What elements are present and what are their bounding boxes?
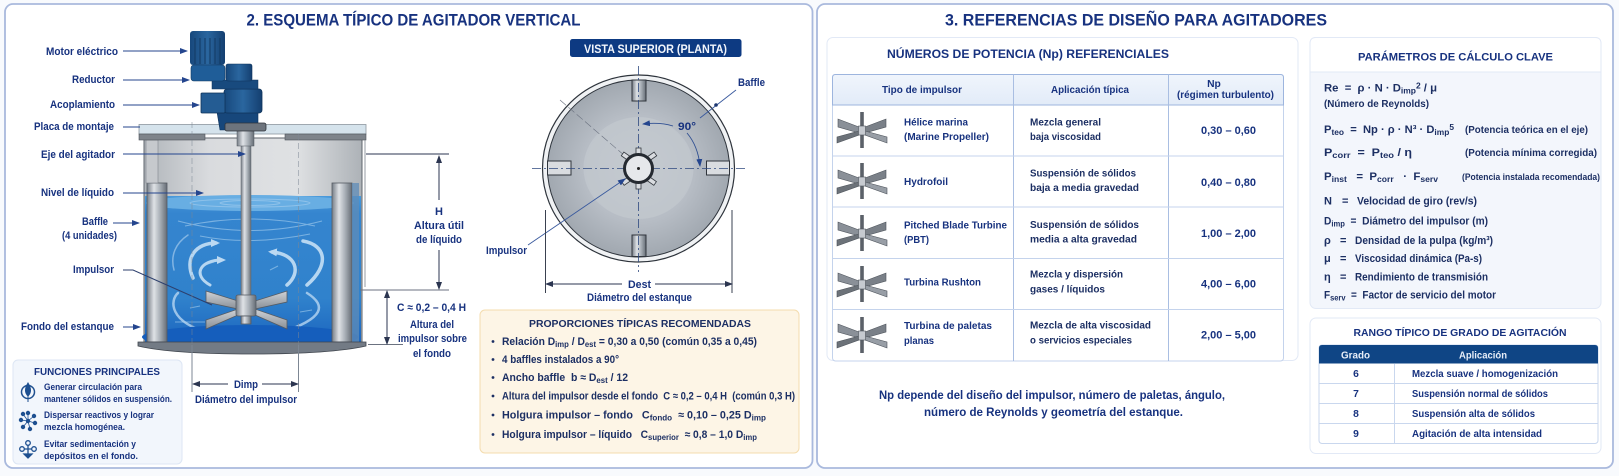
formula: potencia corregida bbox=[1324, 147, 1597, 160]
row: grado 9: Agitación de alta intensidad bbox=[1412, 429, 1542, 440]
formula: potencia teórica: 5 bbox=[1449, 123, 1454, 132]
row: turbina de paletas planas: 2,00 – 5,00 bbox=[1201, 330, 1256, 342]
list: proporciones: = 0,30 a 0,50 (común 0,35 a 0,45) bbox=[596, 336, 757, 348]
baffle top bbox=[632, 80, 646, 101]
text: dispersión bbox=[44, 410, 154, 433]
row: hydrofoil: Hydrofoil bbox=[904, 176, 948, 188]
diagram: planta del estanque bbox=[532, 66, 745, 272]
diagonal line bbox=[560, 100, 625, 156]
center lines bbox=[532, 66, 745, 272]
motor fins bbox=[195, 38, 220, 64]
formula: Reynolds: imp bbox=[1401, 86, 1416, 96]
labels: componentes con flechas: Motor eléctrico bbox=[46, 46, 118, 58]
formula: potencia instalada: (Potencia instalada recomendada) bbox=[1462, 172, 1600, 183]
note: Np: Np depende del diseño del impulsor, número de paletas, ángulo, bbox=[879, 388, 1225, 402]
row: grado 7 bbox=[1353, 389, 1548, 400]
definitions: = Factor de servicio del motor bbox=[1346, 290, 1497, 302]
labels: componentes con flechas: Eje del agitador bbox=[41, 149, 116, 161]
labels: componentes con flechas: Reductor bbox=[72, 74, 116, 86]
labels: componentes con flechas: Fondo del estanque bbox=[21, 321, 114, 333]
definitions: = bbox=[1340, 272, 1346, 284]
heading: parámetros: PARÁMETROS DE CÁLCULO CLAVE bbox=[1358, 50, 1553, 64]
definitions: = Diámetro del impulsor (m) bbox=[1345, 216, 1488, 228]
grid lines bbox=[1319, 364, 1598, 443]
formula: potencia instalada: serv bbox=[1420, 175, 1438, 184]
formula: potencia corregida: teo bbox=[1380, 151, 1394, 160]
text: dispersión: mezcla homogénea. bbox=[44, 422, 125, 433]
row: grado 9 bbox=[1353, 429, 1542, 440]
header labels: Np bbox=[1207, 79, 1221, 90]
dimension: Dimp: Dimp bbox=[234, 379, 258, 391]
bullets bbox=[492, 340, 494, 436]
baffle right bbox=[706, 161, 730, 175]
card: parámetros de cálculo bbox=[1310, 38, 1601, 308]
row: grado 6 bbox=[1353, 369, 1558, 380]
table: Np bbox=[832, 74, 1284, 361]
formula: potencia instalada: = P bbox=[1347, 171, 1377, 183]
bottom water bbox=[142, 325, 358, 349]
tank bottom bbox=[138, 342, 366, 354]
dimension: Dest: Diámetro del estanque bbox=[587, 292, 692, 304]
list: proporciones: Relación D bbox=[502, 336, 559, 348]
baffles bbox=[147, 183, 167, 342]
dimension: altura H bbox=[360, 140, 464, 290]
water surface bbox=[146, 195, 354, 211]
table header bbox=[832, 74, 1284, 105]
badge: vista superior: VISTA SUPERIOR (PLANTA) bbox=[584, 44, 727, 56]
header labels bbox=[1341, 350, 1507, 362]
definitions: μ bbox=[1324, 253, 1331, 265]
definitions: η bbox=[1324, 272, 1331, 284]
header labels: Tipo de impulsor bbox=[882, 85, 962, 96]
motor body bbox=[190, 31, 225, 65]
list: proporciones: est bbox=[585, 340, 596, 349]
row: turbina rushton: Mezcla y dispersión bbox=[1030, 268, 1123, 280]
formula: potencia teórica: = Np · ρ · N³ · D bbox=[1344, 124, 1434, 136]
row: turbina de paletas planas: Turbina de paletas bbox=[904, 320, 992, 332]
text: sedimentación bbox=[44, 439, 138, 462]
badge: vista superior bbox=[570, 39, 742, 57]
definitions: Velocidad de giro (rev/s) bbox=[1357, 196, 1477, 208]
definitions: Rendimiento de transmisión bbox=[1355, 272, 1488, 284]
dimension: altura C: el fondo bbox=[413, 348, 451, 360]
dimension: altura H: de líquido bbox=[416, 234, 462, 246]
row: hélice marina: 0,30 – 0,60 bbox=[1201, 125, 1256, 137]
row: turbina rushton: 4,00 – 6,00 bbox=[1201, 278, 1256, 290]
definitions: D bbox=[1324, 216, 1332, 228]
labels: componentes con flechas: Nivel de líquido bbox=[41, 187, 114, 199]
formula: Reynolds bbox=[1324, 82, 1437, 110]
definitions bbox=[1324, 196, 1497, 302]
callout: impulsor: Impulsor bbox=[486, 245, 528, 257]
icon: circulación bbox=[22, 383, 34, 402]
header labels: Aplicación típica bbox=[1051, 85, 1129, 96]
dimension: Dest: Dest bbox=[628, 279, 651, 291]
card: rango de grado de agitación bbox=[1310, 318, 1601, 454]
formula: potencia teórica bbox=[1324, 123, 1588, 137]
callout: 90 grados: 90° bbox=[678, 121, 696, 133]
formula: potencia instalada: P bbox=[1324, 171, 1331, 183]
list: proporciones: est bbox=[596, 376, 608, 385]
list: proporciones: imp bbox=[555, 340, 569, 349]
formula: potencia teórica: (Potencia teórica en el eje) bbox=[1465, 124, 1588, 136]
list: proporciones: / 12 bbox=[608, 372, 628, 384]
dimension: altura C: C ≈ 0,2 – 0,4 H bbox=[397, 302, 466, 314]
heading: proporciones: PROPORCIONES TÍPICAS RECOMENDADAS bbox=[529, 317, 751, 330]
panel: proporciones típicas bbox=[480, 310, 799, 453]
dimension: altura C: impulsor sobre bbox=[398, 333, 467, 345]
row: hélice marina: baja viscosidad bbox=[1030, 131, 1101, 143]
formula: Reynolds: 2 bbox=[1416, 82, 1421, 90]
text: sedimentación: depósitos en el fondo. bbox=[44, 451, 138, 462]
row: hydrofoil: baja a media gravedad bbox=[1030, 182, 1139, 194]
row: pitched blade turbine: Suspensión de sólidos bbox=[1030, 219, 1139, 231]
row: hélice marina: (Marine Propeller) bbox=[904, 131, 989, 143]
row: pitched blade turbine bbox=[837, 215, 1256, 251]
panel: referencias de diseño bbox=[817, 4, 1613, 468]
labels: componentes con flechas: Baffle bbox=[82, 216, 108, 228]
row: hydrofoil bbox=[837, 163, 1256, 199]
row: hydrofoil: Suspensión de sólidos bbox=[1030, 168, 1136, 180]
formula: potencia teórica: P bbox=[1324, 124, 1331, 136]
row: hydrofoil: 0,40 – 0,80 bbox=[1201, 177, 1256, 189]
icon: sedimentación bbox=[20, 441, 36, 458]
dimension: altura H: Altura útil bbox=[414, 220, 464, 232]
row: pitched blade turbine: 1,00 – 2,00 bbox=[1201, 228, 1256, 240]
row: grado 8: Suspensión alta de sólidos bbox=[1412, 409, 1535, 420]
text: circulación bbox=[44, 382, 172, 405]
labels: componentes con flechas: Impulsor bbox=[73, 264, 115, 276]
definitions: serv bbox=[1330, 294, 1346, 302]
definitions: = bbox=[1342, 196, 1348, 208]
impeller bbox=[206, 291, 287, 329]
list: proporciones: superior bbox=[648, 433, 680, 442]
panel: esquema típico de agitador vertical bbox=[5, 4, 812, 468]
note: Np: número de Reynolds y geometría del estanque. bbox=[924, 405, 1183, 419]
motor bell bbox=[191, 65, 225, 81]
formula: Reynolds: / μ bbox=[1421, 82, 1437, 94]
definitions: F bbox=[1324, 290, 1331, 302]
formula: potencia teórica: imp bbox=[1434, 128, 1449, 137]
callout: baffle: Baffle bbox=[738, 77, 765, 89]
row: turbina rushton: Turbina Rushton bbox=[904, 276, 981, 288]
heading: números de potencia: NÚMEROS DE POTENCIA (Np) REFERENCIALES bbox=[887, 46, 1169, 61]
row: grado 7: 7 bbox=[1353, 389, 1359, 400]
row: hélice marina bbox=[837, 112, 1256, 148]
formula: potencia corregida: / η bbox=[1394, 147, 1412, 159]
row: pitched blade turbine: (PBT) bbox=[904, 234, 929, 246]
impeller hub bbox=[621, 148, 657, 189]
list: proporciones bbox=[502, 336, 795, 442]
shaft bbox=[241, 140, 251, 315]
water bbox=[145, 196, 361, 342]
row: turbina de paletas planas bbox=[837, 317, 1256, 353]
formula: potencia corregida: P bbox=[1324, 147, 1331, 159]
list: proporciones: ≈ 0,8 – 1,0 D bbox=[679, 429, 743, 441]
definitions: ρ bbox=[1324, 235, 1331, 247]
heading: sección 2: 2. ESQUEMA TÍPICO DE AGITADOR VERTICAL bbox=[246, 10, 580, 30]
grid lines bbox=[832, 74, 1284, 361]
formula: potencia instalada bbox=[1324, 171, 1600, 184]
text: circulación: Generar circulación para bbox=[44, 382, 143, 393]
heading: funciones: FUNCIONES PRINCIPALES bbox=[34, 366, 160, 378]
dimension: altura C: Altura del bbox=[410, 319, 454, 331]
list: proporciones: 4 baffles instalados a 90° bbox=[502, 354, 619, 366]
formula: potencia corregida: corr bbox=[1332, 151, 1351, 160]
list: proporciones: Holgura impulsor – fondo C bbox=[502, 410, 653, 422]
icon: dispersión bbox=[19, 411, 37, 431]
floor bbox=[548, 80, 730, 257]
top flange left bbox=[139, 134, 205, 140]
list: proporciones: Ancho baffle b ≈ D bbox=[502, 372, 602, 384]
note: Np bbox=[879, 388, 1225, 419]
tank rim bbox=[139, 124, 366, 134]
header labels: Grado bbox=[1341, 350, 1370, 362]
definitions: Viscosidad dinámica (Pa-s) bbox=[1355, 253, 1482, 265]
row: grado 8 bbox=[1353, 409, 1535, 420]
row: turbina rushton: gases / líquidos bbox=[1030, 284, 1105, 296]
callout: impulsor bbox=[486, 179, 625, 257]
header labels bbox=[882, 79, 1274, 101]
table header bbox=[1319, 345, 1598, 364]
tank wall bbox=[144, 138, 362, 344]
list: proporciones: Holgura impulsor – líquido C bbox=[502, 429, 658, 441]
diagram: tanque agitador bbox=[138, 31, 366, 354]
gearbox neck bbox=[212, 80, 258, 89]
row: turbina rushton bbox=[837, 266, 1256, 302]
dimension: altura H: H bbox=[435, 206, 443, 218]
dimension: Dimp: Diámetro del impulsor bbox=[195, 394, 298, 406]
row: turbina de paletas planas: planas bbox=[904, 335, 934, 347]
labels: componentes con flechas: Acoplamiento bbox=[50, 99, 115, 111]
callout: baffle bbox=[700, 77, 765, 118]
flow arrows bbox=[173, 235, 322, 333]
definitions: = bbox=[1340, 235, 1346, 247]
list: proporciones: ≈ 0,10 – 0,25 D bbox=[672, 410, 752, 422]
formula: potencia instalada: corr bbox=[1377, 175, 1395, 184]
formula: potencia corregida: (Potencia mínima corregida) bbox=[1465, 147, 1597, 159]
callout: 90 grados bbox=[643, 121, 700, 166]
row: turbina de paletas planas: o servicios especiales bbox=[1030, 334, 1132, 346]
mounting flange bbox=[225, 123, 266, 131]
labels: componentes con flechas: (4 unidades) bbox=[62, 230, 117, 242]
header labels: Aplicación bbox=[1459, 350, 1507, 362]
row: pitched blade turbine: media a alta gravedad bbox=[1030, 234, 1137, 246]
list: proporciones: fondo bbox=[650, 414, 672, 422]
definitions: N bbox=[1324, 196, 1332, 208]
swirl lines bbox=[175, 199, 322, 322]
row: grado 7: Suspensión normal de sólidos bbox=[1412, 389, 1548, 400]
formula: Reynolds: (Número de Reynolds) bbox=[1324, 98, 1429, 110]
formula: potencia teórica: teo bbox=[1331, 128, 1344, 137]
baffle left bbox=[548, 161, 571, 175]
text: dispersión: Dispersar reactivos y lograr bbox=[44, 410, 154, 421]
list: proporciones: imp bbox=[752, 414, 766, 422]
heading: sección 3: 3. REFERENCIAS DE DISEÑO PARA AGITADORES bbox=[945, 10, 1327, 30]
formula: potencia instalada: · F bbox=[1394, 171, 1421, 183]
gearbox lower bbox=[217, 112, 258, 130]
table: grados bbox=[1319, 345, 1598, 444]
definitions: = bbox=[1340, 253, 1346, 265]
panel: funciones principales bbox=[13, 360, 182, 464]
text: circulación: mantener sólidos en suspensión. bbox=[44, 394, 172, 405]
dimension: Dimp bbox=[192, 122, 298, 406]
labels: componentes con flechas: Placa de montaje bbox=[34, 121, 114, 133]
row: hélice marina: Hélice marina bbox=[904, 116, 968, 128]
card: números de potencia bbox=[827, 38, 1298, 361]
list: proporciones: imp bbox=[743, 433, 757, 442]
formula: potencia corregida: = P bbox=[1351, 147, 1380, 159]
row: grado 6: Mezcla suave / homogenización bbox=[1412, 369, 1558, 380]
row: turbina de paletas planas: Mezcla de alta viscosidad bbox=[1030, 320, 1151, 332]
formula: Reynolds: Re = ρ · N · D bbox=[1324, 82, 1399, 94]
formula: potencia instalada: inst bbox=[1332, 175, 1347, 184]
row: pitched blade turbine: Pitched Blade Turbine bbox=[904, 220, 1007, 232]
outer wall bbox=[542, 75, 734, 262]
gearbox bbox=[224, 89, 262, 113]
dimension: altura C bbox=[368, 291, 467, 360]
row: hélice marina: Mezcla general bbox=[1030, 116, 1101, 128]
row: grado 6: 6 bbox=[1353, 369, 1359, 380]
text: sedimentación: Evitar sedimentación y bbox=[44, 439, 137, 450]
definitions: Densidad de la pulpa (kg/m³) bbox=[1355, 235, 1493, 247]
heading: rango: RANGO TÍPICO DE GRADO DE AGITACIÓN bbox=[1354, 326, 1566, 339]
header labels: (régimen turbulento) bbox=[1177, 90, 1274, 101]
top flange right bbox=[285, 134, 366, 140]
labels: componentes con flechas bbox=[21, 46, 245, 333]
list: proporciones: / D bbox=[569, 336, 585, 348]
row: grado 9: 9 bbox=[1353, 429, 1359, 440]
baffle bottom bbox=[632, 235, 646, 256]
definitions: imp bbox=[1331, 220, 1345, 228]
list: proporciones: Altura del impulsor desde el fondo C ≈ 0,2 – 0,4 H (común 0,3 H) bbox=[502, 390, 795, 402]
dimension: Dest bbox=[546, 210, 732, 304]
reducer top bbox=[226, 64, 252, 81]
row: grado 8: 8 bbox=[1353, 409, 1359, 420]
